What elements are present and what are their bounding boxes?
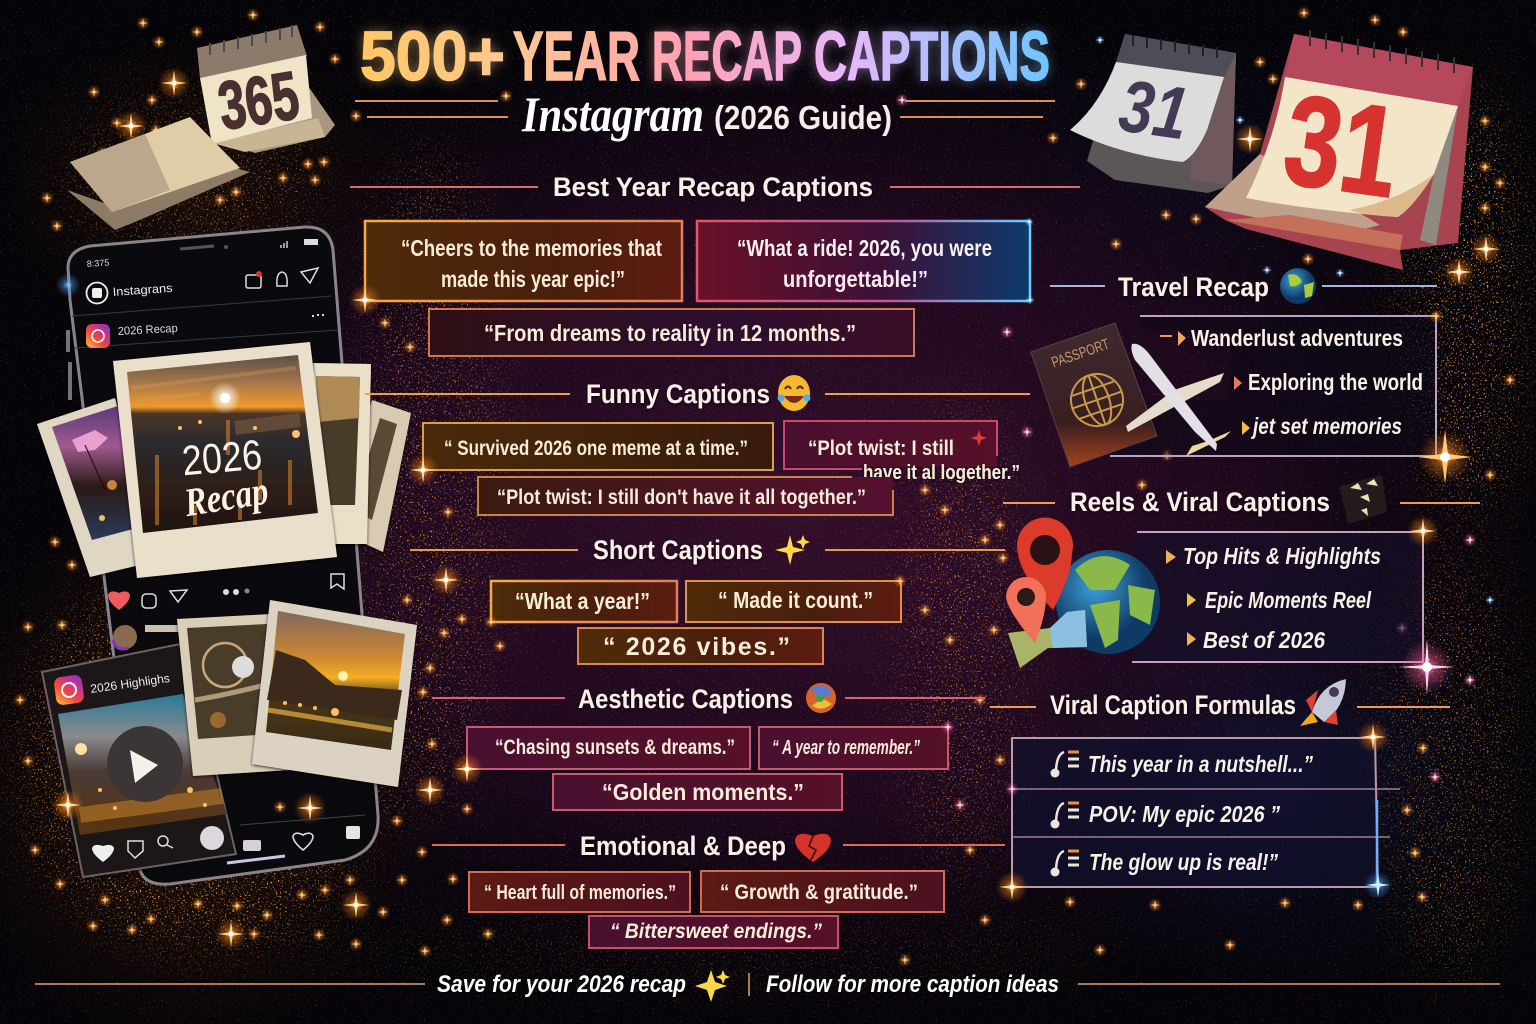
title: CAPTIONS xyxy=(814,17,1050,95)
caption: chasing sunsets: “Chasing sunsets & dreams.” xyxy=(495,736,735,759)
caption: made it count xyxy=(686,574,907,622)
heading: emotional: Emotional & Deep xyxy=(580,831,786,861)
panel: travel list xyxy=(1110,309,1472,484)
row: glow up xyxy=(1050,849,1278,876)
row: best of: Best of 2026 xyxy=(1203,627,1325,653)
phone nav xyxy=(227,826,360,863)
row: wanderlust: Wanderlust adventures xyxy=(1191,325,1403,351)
caption: bittersweet xyxy=(589,916,838,948)
icon: rocket xyxy=(1300,679,1346,726)
caption: what a ride xyxy=(697,217,1035,305)
caption: made it count: “ Made it count.” xyxy=(718,587,873,613)
caption: plot twist small xyxy=(784,421,1020,484)
polaroid caption: 2026 xyxy=(180,431,264,484)
icon: laughing emoji xyxy=(778,375,810,411)
title: RECAP xyxy=(652,17,802,95)
section: Short Captions xyxy=(410,535,1005,664)
caption: golden moments xyxy=(553,774,842,810)
caption: chasing sunsets xyxy=(451,727,750,785)
icon: grey calendar 31 xyxy=(1070,34,1236,193)
card: 2026 highlights xyxy=(42,643,236,877)
section: Funny Captions xyxy=(365,375,1030,515)
section: Travel Recap xyxy=(1031,268,1472,484)
caption: cheers xyxy=(349,221,682,316)
heading: short: Short Captions xyxy=(593,535,763,565)
caption: growth xyxy=(701,871,944,912)
icon: 365 calendar: 365 xyxy=(213,57,304,145)
caption: what a ride: “What a ride! 2026, you were xyxy=(737,235,992,261)
phone status text: 8:375 xyxy=(86,257,110,269)
section: Reels & Viral Captions xyxy=(1003,475,1480,695)
phone lower dark lights xyxy=(240,792,365,825)
recap row xyxy=(86,315,324,348)
polaroid: right xyxy=(313,363,371,544)
title xyxy=(360,17,1050,95)
subtitle: (2026 Guide) xyxy=(714,99,892,136)
icon: passport xyxy=(1031,323,1157,467)
heading: funny: Funny Captions xyxy=(586,379,770,409)
caption: golden moments: “Golden moments.” xyxy=(602,779,804,805)
panel: reels list xyxy=(1132,515,1455,695)
title: 500+ xyxy=(360,17,505,95)
icon: clapper xyxy=(1340,475,1387,524)
section: Best Year Recap Captions xyxy=(349,172,1080,356)
caption: plot twist small: “Plot twist: I still xyxy=(808,437,954,460)
caption: plot twist: “Plot twist: I still don't have it all together.” xyxy=(497,486,866,509)
caption: 2026 vibes: “ 2026 vibes.” xyxy=(603,633,790,661)
caption: 2026 vibes xyxy=(578,628,823,664)
caption: heart full xyxy=(469,872,690,912)
row: pov: POV: My epic 2026 ” xyxy=(1089,801,1280,827)
section: Aesthetic Captions xyxy=(432,683,985,810)
caption: dreams: “From dreams to reality in 12 months.” xyxy=(484,320,856,346)
polaroid caption xyxy=(180,431,271,525)
section: Viral Caption Formulas xyxy=(990,679,1450,903)
icon: globe xyxy=(1280,268,1316,304)
footer xyxy=(35,970,1500,1002)
heading: reels: Reels & Viral Captions xyxy=(1070,487,1330,517)
caption: bittersweet: “ Bittersweet endings.” xyxy=(610,920,822,943)
icon: globe and pins xyxy=(1006,518,1160,668)
polaroid caption: Recap xyxy=(180,468,271,525)
footer: Save for your 2026 recap xyxy=(437,971,686,998)
row: epic moments: Epic Moments Reel xyxy=(1205,587,1371,613)
icon: red calendar 31 xyxy=(1205,30,1473,270)
caption: plot twist small: have it al logether.” xyxy=(863,462,1020,484)
polaroid: left purple xyxy=(37,398,160,577)
caption: cheers: “Cheers to the memories that xyxy=(401,235,662,261)
subtitle xyxy=(355,86,1055,142)
caption: dreams xyxy=(429,309,914,356)
action icons xyxy=(108,574,344,649)
polaroid: far right xyxy=(335,400,411,552)
icon: grey calendar 31: 31 xyxy=(1114,64,1193,155)
caption: what a year: “What a year!” xyxy=(515,588,650,614)
caption: growth: “ Growth & gratitude.” xyxy=(720,881,918,904)
section: Emotional & Deep xyxy=(432,831,1005,948)
row: nutshell: This year in a nutshell...” xyxy=(1088,751,1313,777)
caption: plot twist xyxy=(478,477,893,515)
subtitle: Instagram xyxy=(521,86,704,142)
icon: palette ball xyxy=(806,683,836,713)
caption: a year to remember: “ A year to remember.” xyxy=(772,737,920,759)
instagram header: Instagrans xyxy=(112,281,173,299)
icon: red calendar 31: 31 xyxy=(1276,68,1407,225)
heading: best year: Best Year Recap Captions xyxy=(553,172,873,202)
caption: what a ride: unforgettable!” xyxy=(783,266,928,292)
recap row: 2026 Recap xyxy=(118,323,178,338)
caption: heart full: “ Heart full of memories.” xyxy=(484,882,676,904)
icon: passport: PASSPORT xyxy=(1049,336,1112,371)
title: YEAR xyxy=(513,17,640,95)
icon: folded paper xyxy=(67,117,250,230)
title: 500+ xyxy=(360,17,505,95)
icon: sparkles xyxy=(775,535,810,565)
card: 2026 highlights: 2026 Highlighs xyxy=(89,671,171,696)
caption: survived: “ Survived 2026 one meme at a time.” xyxy=(444,437,748,460)
icon: plane xyxy=(1126,344,1231,456)
polaroid: main 2026 recap xyxy=(113,342,337,578)
row: glow up: The glow up is real!” xyxy=(1089,849,1278,875)
caption: what a year xyxy=(484,581,677,629)
title: CAPTIONS xyxy=(814,17,1050,95)
phone status icons xyxy=(281,239,318,248)
row: top hits: Top Hits & Highlights xyxy=(1183,543,1381,569)
instagram header xyxy=(72,268,338,348)
polaroid: mountain sunset xyxy=(252,600,417,787)
icon: broken heart xyxy=(795,834,831,862)
caption: survived xyxy=(407,423,773,486)
caption: cheers: made this year epic!” xyxy=(441,266,625,292)
title: RECAP xyxy=(652,17,802,95)
panel: formulas xyxy=(996,721,1400,903)
phone mockup xyxy=(56,227,378,884)
row: exploring: Exploring the world xyxy=(1248,369,1423,395)
heading: travel: Travel Recap xyxy=(1118,272,1269,302)
heading: formulas: Viral Caption Formulas xyxy=(1050,690,1296,720)
icon: 365 calendar xyxy=(197,25,335,153)
polaroid: globe ride xyxy=(177,614,290,776)
row: jet set: jet set memories xyxy=(1251,413,1402,439)
heading: aesthetic: Aesthetic Captions xyxy=(578,684,793,714)
caption: a year to remember xyxy=(759,720,955,769)
footer: Follow for more caption ideas xyxy=(766,971,1059,998)
